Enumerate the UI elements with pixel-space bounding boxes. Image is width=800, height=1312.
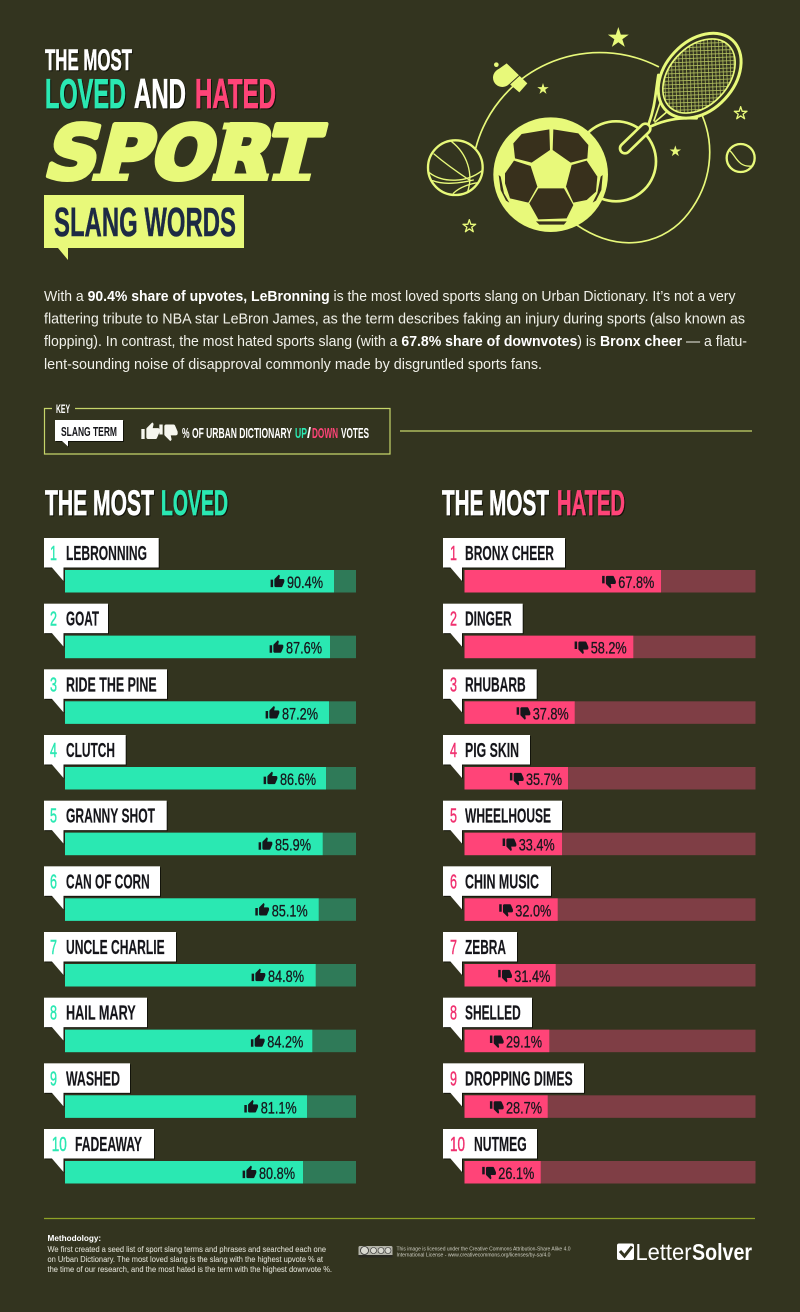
- illustration: sports equipment: [428, 17, 758, 243]
- row: nutmeg: 10: [450, 1134, 465, 1156]
- row: wheelhouse: 33.4%: [519, 836, 555, 855]
- row: rhubarb: 37.8%: [533, 704, 569, 723]
- row: ride the pine: 87.2%: [282, 704, 318, 723]
- row: goat: GOAT: [66, 609, 99, 631]
- icon: creative commons badge: [358, 1246, 392, 1258]
- key: slang term bubble: [55, 420, 123, 446]
- row: rhubarb: [443, 669, 756, 724]
- chart: most loved: [44, 538, 356, 1184]
- row: bronx cheer: [443, 538, 756, 592]
- row: lebronning: 90.4%: [287, 573, 323, 592]
- row: chin music: [443, 866, 756, 921]
- key heading: KEY: [56, 404, 70, 416]
- row: nutmeg: 26.1%: [498, 1164, 534, 1183]
- key: votes description: VOTES: [341, 425, 369, 442]
- row: chin music: 32.0%: [515, 901, 551, 920]
- key: thumbs icons: [141, 422, 178, 441]
- row: pig skin: 35.7%: [526, 770, 562, 789]
- key: votes description: UP: [295, 425, 307, 442]
- methodology: We first created a seed list of sport slang terms and phrases and searched each one: [48, 1245, 326, 1254]
- row: hail mary: 84.2%: [267, 1033, 303, 1052]
- license text: International License - www.creativecommons.org/licenses/by-sa/4.0: [396, 1252, 551, 1258]
- row: shelled: SHELLED: [465, 1003, 521, 1025]
- row: can of corn: CAN OF CORN: [66, 871, 150, 893]
- row: granny shot: GRANNY SHOT: [66, 806, 155, 828]
- methodology: [48, 1234, 332, 1274]
- icon: tennis racket: [625, 17, 758, 148]
- row: washed: WASHED: [66, 1068, 120, 1090]
- row: zebra: 31.4%: [514, 967, 550, 986]
- key panel: [44, 404, 390, 454]
- row: chin music: CHIN MUSIC: [465, 871, 539, 893]
- intro paragraph: flopping). In contrast, the most hated sports slang (with a 67.8% share of downvotes) is Bronx cheer — a flatu-: [44, 333, 747, 350]
- row: chin music: 6: [450, 871, 457, 893]
- title: slang words speech bubble: SLANG WORDS: [54, 199, 236, 245]
- row: zebra: [443, 932, 756, 986]
- methodology: the time of our research, and the most hated is the term with the highest downvote %.: [48, 1265, 332, 1274]
- row: dropping dimes: [443, 1063, 756, 1118]
- row: dinger: 58.2%: [591, 639, 627, 658]
- row: hail mary: HAIL MARY: [66, 1003, 136, 1025]
- row: rhubarb: 3: [450, 674, 457, 696]
- title: loved and hated: AND: [134, 70, 186, 117]
- row: lebronning: LEBRONNING: [66, 543, 147, 565]
- row: washed: 81.1%: [261, 1098, 297, 1117]
- row: bronx cheer: 1: [450, 543, 457, 565]
- row: pig skin: PIG SKIN: [465, 740, 519, 762]
- intro paragraph: flattering tribute to NBA star LeBron James, as the term describes faking an injury during sports (also known as: [44, 310, 745, 328]
- row: can of corn: 85.1%: [272, 901, 308, 920]
- row: lebronning: 1: [50, 543, 57, 565]
- row: nutmeg: [443, 1129, 756, 1184]
- icon: whistle: [493, 62, 527, 92]
- intro paragraph: lent-sounding noise of disapproval commonly made by disgruntled sports fans.: [44, 356, 542, 373]
- icon: basketball: [428, 140, 483, 195]
- row: dropping dimes: DROPPING DIMES: [465, 1068, 573, 1090]
- row: ride the pine: [44, 669, 356, 724]
- row: hail mary: 8: [50, 1003, 57, 1025]
- row: dinger: DINGER: [465, 609, 512, 631]
- row: uncle charlie: 84.8%: [268, 967, 304, 986]
- row: uncle charlie: [44, 932, 356, 986]
- methodology: Methodology:: [48, 1234, 101, 1243]
- row: clutch: 4: [50, 740, 57, 762]
- license text: This image is licensed under the Creative Commons Attribution-Share Alike 4.0: [396, 1246, 571, 1252]
- logo: letter solver: Letter: [636, 1239, 692, 1265]
- key: votes description: % OF URBAN DICTIONARY: [182, 425, 292, 442]
- intro paragraph: With a 90.4% share of upvotes, LeBronning is the most loved sports slang on Urban Dictionary. It’s not a very: [44, 288, 736, 305]
- row: uncle charlie: 7: [50, 937, 57, 959]
- logo: letter solver: [617, 1239, 752, 1265]
- row: lebronning: [44, 538, 356, 592]
- row: hail mary: [44, 998, 356, 1052]
- row: pig skin: [443, 735, 756, 790]
- heading: the most hated: THE MOST: [442, 484, 549, 523]
- icon: tennis ball: [727, 144, 755, 172]
- row: goat: [44, 604, 356, 658]
- row: rhubarb: RHUBARB: [465, 674, 526, 696]
- row: fadeaway: [44, 1129, 356, 1184]
- row: nutmeg: NUTMEG: [474, 1134, 527, 1156]
- row: washed: 9: [50, 1068, 57, 1090]
- row: clutch: 86.6%: [280, 770, 316, 789]
- row: uncle charlie: UNCLE CHARLIE: [66, 937, 165, 959]
- row: granny shot: 5: [50, 806, 57, 828]
- row: shelled: [443, 998, 756, 1052]
- license text: [396, 1246, 571, 1258]
- row: bronx cheer: BRONX CHEER: [465, 543, 554, 565]
- row: pig skin: 4: [450, 740, 457, 762]
- title block: [38, 44, 330, 260]
- row: ride the pine: RIDE THE PINE: [66, 674, 157, 696]
- intro paragraph: [44, 288, 747, 373]
- row: shelled: 29.1%: [506, 1033, 542, 1052]
- row: clutch: [44, 735, 356, 790]
- row: goat: 2: [50, 609, 57, 631]
- key: votes description: /: [307, 425, 312, 442]
- row: washed: [44, 1063, 356, 1118]
- row: zebra: 7: [450, 937, 457, 959]
- key: slang term bubble: SLANG TERM: [61, 424, 117, 439]
- row: can of corn: 6: [50, 871, 57, 893]
- row: fadeaway: FADEAWAY: [75, 1134, 142, 1156]
- row: shelled: 8: [450, 1003, 457, 1025]
- title: slang words speech bubble: [44, 195, 244, 260]
- row: fadeaway: 10: [52, 1134, 67, 1156]
- row: wheelhouse: WHEELHOUSE: [465, 806, 551, 828]
- heading: the most loved: THE MOST: [45, 484, 154, 523]
- row: wheelhouse: 5: [450, 806, 457, 828]
- row: granny shot: [44, 801, 356, 855]
- chart: most hated: [443, 538, 756, 1184]
- icon: logo check box: [617, 1244, 634, 1260]
- row: wheelhouse: [443, 801, 756, 855]
- row: dinger: [443, 604, 756, 658]
- orbit lines: [476, 53, 710, 243]
- key: votes description: DOWN: [312, 425, 338, 442]
- row: clutch: CLUTCH: [66, 740, 115, 762]
- row: dropping dimes: 9: [450, 1068, 457, 1090]
- title: loved and hated: [45, 70, 276, 117]
- methodology: on Urban Dictionary. The most loved slang is the slang with the highest upvote % at: [48, 1255, 324, 1264]
- row: ride the pine: 3: [50, 674, 57, 696]
- row: dinger: 2: [450, 609, 457, 631]
- title: the most: THE MOST: [45, 44, 132, 77]
- row: dropping dimes: 28.7%: [506, 1098, 542, 1117]
- row: can of corn: [44, 866, 356, 921]
- row: bronx cheer: 67.8%: [618, 573, 654, 592]
- row: granny shot: 85.9%: [275, 836, 311, 855]
- icon: stars: [463, 27, 747, 232]
- row: goat: 87.6%: [286, 639, 322, 658]
- title: sport: SPORT: [38, 110, 330, 196]
- heading: the most loved: LOVED: [161, 484, 228, 523]
- row: zebra: ZEBRA: [465, 937, 506, 959]
- heading: the most hated: HATED: [557, 484, 625, 523]
- title: loved and hated: HATED: [195, 70, 276, 117]
- icon: soccer ball: [493, 117, 608, 232]
- title: loved and hated: LOVED: [45, 70, 126, 117]
- logo: letter solver: Solver: [692, 1239, 752, 1265]
- row: fadeaway: 80.8%: [259, 1164, 295, 1183]
